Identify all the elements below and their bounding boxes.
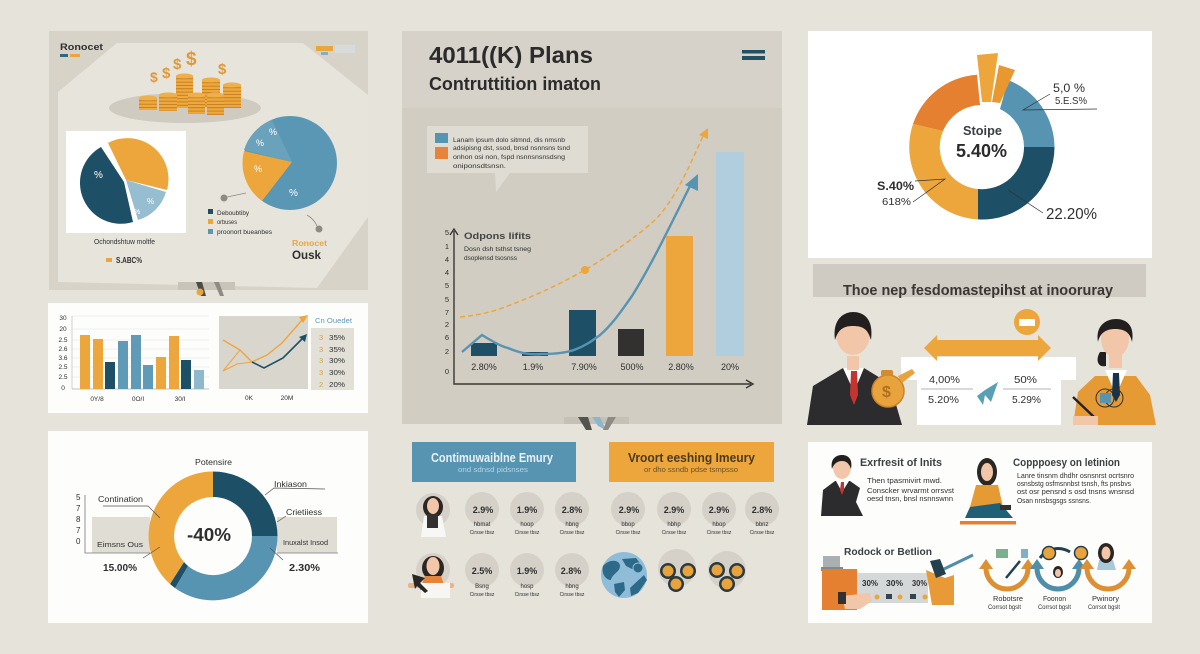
stat circles: row two bbox=[465, 553, 589, 598]
legend: trend values: 3 bbox=[319, 333, 323, 342]
chart: axes and ticks: 4 bbox=[445, 268, 449, 277]
value: pie amount: S.ABC% bbox=[116, 255, 142, 265]
icon: woman writing bbox=[408, 553, 454, 598]
chart: grouped bars: 3.6 bbox=[58, 355, 68, 362]
labels: donut callouts bbox=[76, 457, 328, 574]
chart: segmented donut bbox=[909, 53, 1054, 220]
mini legend right bbox=[316, 45, 355, 55]
legend: trend values: 3 bbox=[319, 345, 323, 354]
labels: donut callouts: 5,0 % bbox=[1053, 81, 1085, 95]
labels: donut callouts: S.40% bbox=[877, 179, 914, 193]
labels: cycle captions: Corrsot bgslt bbox=[988, 605, 1021, 611]
labels: donut callouts: 5 bbox=[76, 493, 81, 502]
icon: floating dollars: $ bbox=[186, 49, 197, 70]
illustration: folder and data strip bbox=[821, 555, 973, 610]
icon: businessman with money bbox=[807, 312, 915, 425]
labels: donut callouts: 2.30% bbox=[289, 562, 321, 574]
banner: partnership heading: Thoe nep fesdomastepihst at inooruray bbox=[843, 282, 1114, 299]
labels: donut callouts: 0 bbox=[76, 537, 81, 546]
legend: trend values: 3 bbox=[319, 368, 323, 377]
stat circles: row one: hbmat bbox=[474, 522, 491, 528]
labels: bar values: 1.9% bbox=[523, 362, 543, 372]
chart: trend lines: 0K bbox=[245, 395, 254, 402]
icon: orange badge bbox=[1014, 309, 1040, 335]
comparison card with arrow bbox=[901, 309, 1076, 425]
icon: globe bbox=[601, 552, 647, 598]
icon: floating dollars: $ bbox=[162, 65, 171, 82]
stat circles: row one: Cirsse tbsz bbox=[616, 530, 641, 536]
labels: donut callouts: 5.E.S% bbox=[1055, 95, 1087, 107]
stat circles: row one: Cirsse tbsz bbox=[750, 530, 775, 536]
icon: teal arrow bbox=[977, 382, 998, 405]
text: options limits bbox=[464, 231, 531, 262]
callout: note with legend: adsipisng dst, ssod, bnsd nsnnsns tsnd bbox=[453, 146, 570, 152]
labels: bar values: 500% bbox=[620, 362, 644, 372]
labels: bar values: 7.90% bbox=[571, 362, 597, 372]
stat circles: row two: hosp bbox=[520, 584, 534, 590]
stat circles: row one: 2.9% bbox=[619, 505, 639, 515]
stat circles: row one: Cirsse tbsz bbox=[662, 530, 687, 536]
stat circles: row one: bbnz bbox=[755, 522, 769, 528]
stat circles: row two: 2.8% bbox=[561, 566, 581, 576]
legend: trend values: Cn Ouedet bbox=[315, 318, 352, 325]
chart: grouped bars: 0O/I bbox=[132, 396, 144, 403]
callout: note with legend: oniponsdtsnsn. bbox=[453, 164, 506, 170]
chart: axes and ticks: 5 bbox=[445, 295, 449, 304]
stat circles: row one: hbng bbox=[565, 522, 579, 528]
legend: blue pie: proonort bueanbes bbox=[217, 229, 273, 236]
icon: businessman with money: $ bbox=[882, 384, 891, 401]
decoration: easel foot bbox=[178, 282, 235, 296]
labels: donut callouts bbox=[877, 81, 1097, 223]
illustration: folder and data strip: 30% bbox=[886, 579, 903, 588]
chart: axes and ticks: 7 bbox=[445, 308, 449, 317]
banner: vesting summary: or dho ssndb pdse tsmpsso bbox=[644, 465, 738, 474]
stat circles: row one: Cirsse tbsz bbox=[707, 530, 732, 536]
icon: coin cluster one bbox=[658, 549, 696, 592]
labels: bar values: 2.80% bbox=[668, 362, 694, 372]
arrow: double headed bbox=[924, 335, 1051, 361]
legend: trend values: 3 bbox=[319, 356, 323, 365]
chart: trend lines bbox=[219, 315, 308, 402]
callout: note with legend: Lanam ipsum dolo sitmnd, dis nmsnb bbox=[453, 138, 566, 144]
labels: cycle captions: Corrsot bgslt bbox=[1088, 605, 1120, 611]
banner: vesting summary bbox=[609, 442, 774, 482]
chart: axes and ticks: 5 bbox=[445, 228, 449, 237]
chart: axes and ticks: 2 bbox=[445, 347, 449, 356]
icon: woman at desk bbox=[960, 458, 1016, 524]
chart: donut: -40% bbox=[187, 525, 231, 545]
chart: axes and ticks: 6 bbox=[445, 333, 449, 342]
stat circles: row one: bbop bbox=[621, 522, 635, 528]
stat circles: row two: 2.5% bbox=[472, 566, 492, 576]
stat circles: row one: 1.9% bbox=[517, 505, 537, 515]
legend: trend values: 30% bbox=[329, 356, 345, 365]
illustration: folder and data strip: 30% bbox=[912, 579, 927, 588]
heading: title: 4011((K) Plans bbox=[429, 42, 593, 68]
chart: axes and ticks bbox=[445, 228, 753, 388]
legend: trend values: 35% bbox=[329, 333, 345, 342]
connector nodes bbox=[220, 193, 322, 232]
labels: donut callouts: Eimsns Ous bbox=[97, 540, 143, 549]
text: limits body: Conscker wrvarmt orrsvst bbox=[867, 488, 954, 495]
chart: pie on white card: % bbox=[134, 209, 140, 216]
heading: subtitle: Contruttition imaton bbox=[429, 74, 601, 94]
labels: bar values: 20% bbox=[721, 362, 739, 372]
values: comparison: 4,00% bbox=[929, 374, 960, 386]
chart: pie on white card: % bbox=[147, 197, 154, 206]
stat circles: row two: Bsng bbox=[475, 584, 489, 590]
stat circles: row one: hbop bbox=[712, 522, 726, 528]
values: comparison: 50% bbox=[1014, 374, 1037, 386]
chart: blue pie: % bbox=[289, 188, 298, 199]
labels: cycle captions: Robotsre bbox=[993, 596, 1023, 603]
stat circles: row one: Cirsse tbsz bbox=[470, 530, 495, 536]
decoration: connector emblem bbox=[564, 417, 629, 430]
icon: orange cycle with person bbox=[1080, 543, 1136, 589]
legend: trend values bbox=[311, 318, 354, 390]
chart: grouped bars: 30 bbox=[59, 315, 67, 322]
stat circles: row one: 2.9% bbox=[473, 505, 493, 515]
stat circles: row two: Cirsse tbsz bbox=[515, 592, 540, 598]
stat circles: row one: hoop bbox=[520, 522, 534, 528]
icon: advisor woman bbox=[1073, 319, 1156, 425]
legend: blue pie bbox=[208, 209, 273, 236]
text: donut centre: Stoipe bbox=[963, 123, 1002, 138]
icon: floating dollars: $ bbox=[150, 69, 158, 85]
banner: contribution summary: ond sdnsd pidsnses bbox=[458, 465, 528, 474]
heading: company definition: Copppoesy on letinion bbox=[1013, 457, 1120, 469]
stat circles: row two: hbng bbox=[565, 584, 579, 590]
labels: cycle captions bbox=[988, 596, 1120, 611]
labels: donut callouts: Inuxalst Insod bbox=[283, 538, 328, 547]
labels: donut callouts: Potensire bbox=[195, 457, 232, 467]
stat circles: row two: Cirsse tbsz bbox=[560, 592, 585, 598]
chart: axes and ticks: 5 bbox=[445, 281, 449, 290]
banner: contribution summary: Contimuwaiblne Emury bbox=[431, 451, 553, 465]
label: Ousk: Ousk bbox=[292, 248, 321, 262]
chart: grouped bars: 0 bbox=[61, 385, 65, 392]
icon: menu bars bbox=[742, 50, 765, 60]
arrow: blue growth curve bbox=[462, 174, 698, 354]
chart: blue pie: % bbox=[254, 164, 262, 174]
panel: 401(k) main chart bbox=[402, 31, 782, 430]
value: pie amount bbox=[106, 255, 142, 265]
labels: bar values bbox=[471, 362, 739, 372]
legend: blue pie: Deboubtiby bbox=[217, 210, 250, 217]
illustration: folder and data strip: 30% bbox=[862, 579, 878, 588]
labels: donut callouts: 8 bbox=[76, 515, 81, 524]
chart: grouped bars: 30/I bbox=[175, 396, 186, 403]
labels: donut callouts: 618% bbox=[882, 196, 911, 208]
stat circles: row one: 2.8% bbox=[752, 505, 772, 515]
labels: donut callouts: 22.20% bbox=[1046, 206, 1097, 223]
stat circles: row two: Cirsse tbsz bbox=[470, 592, 495, 598]
labels: donut callouts: 7 bbox=[76, 526, 81, 535]
chart: bars bbox=[471, 152, 744, 356]
labels: cycle captions: Pwinory bbox=[1092, 596, 1120, 603]
chart: axes and ticks: 0 bbox=[445, 367, 449, 376]
chart: axes and ticks: 1 bbox=[445, 242, 449, 251]
stat circles: row one: Cirsse tbsz bbox=[560, 530, 585, 536]
chart: grouped bars: 2.5 bbox=[58, 364, 68, 371]
panel: contribution donut bbox=[48, 431, 368, 623]
values: comparison: 5.20% bbox=[928, 394, 959, 406]
legend: trend values: 35% bbox=[329, 345, 345, 354]
text: limits body: oesd tnsn, bnsl nsnnswnn bbox=[867, 496, 953, 503]
stat circles: row one: hbhp bbox=[667, 522, 681, 528]
chart: axes and ticks: 2 bbox=[445, 320, 449, 329]
text: options limits: Dosn dsh tsthst tsneg bbox=[464, 246, 531, 253]
panel: stop donut bbox=[808, 31, 1152, 258]
caption: pie note: Ochondshtuw moltfe bbox=[94, 239, 155, 246]
text: company body bbox=[1017, 473, 1134, 505]
chart: trend lines: 20M bbox=[281, 395, 293, 402]
text: options limits: Odpons lifits bbox=[464, 231, 531, 242]
icon: floating dollars: $ bbox=[173, 56, 182, 73]
legend: blue pie: orbuses bbox=[217, 219, 238, 226]
stat circles: row one: 2.9% bbox=[664, 505, 684, 515]
values: comparison bbox=[921, 374, 1051, 406]
labels: bar values: 2.80% bbox=[471, 362, 497, 372]
chart: axes and ticks: 4 bbox=[445, 255, 449, 264]
icon: coin stacks on plate bbox=[109, 74, 261, 123]
text: company body: Lanre tinsnm dhdhr osnsnrst ocrtsnro bbox=[1017, 473, 1134, 480]
banner: partnership heading bbox=[813, 264, 1146, 299]
legend: trend values: 30% bbox=[329, 368, 345, 377]
labels: cycle captions: Foonon bbox=[1043, 596, 1066, 603]
mini legend left bbox=[60, 54, 80, 57]
text: limits body: Then tpasmivirt mwd. bbox=[867, 478, 942, 485]
banner: contribution summary bbox=[412, 442, 576, 482]
chart: grouped bars: 2.5 bbox=[58, 337, 68, 344]
chart: blue pie bbox=[242, 116, 337, 210]
labels: donut callouts: Crietiiess bbox=[286, 508, 322, 517]
panel: bar and line charts bbox=[48, 303, 368, 413]
chart: grouped bars: 20 bbox=[59, 326, 67, 333]
icon: coin cluster two bbox=[708, 551, 746, 592]
text: donut centre bbox=[956, 123, 1007, 161]
icon: blue cycle bbox=[1030, 546, 1088, 589]
callout: note with legend bbox=[427, 126, 588, 192]
arrow: dashed orange trend bbox=[460, 128, 708, 317]
values: comparison: 5.29% bbox=[1012, 394, 1041, 406]
labels: cycle captions: Corrsot bgslt bbox=[1038, 605, 1071, 611]
icon: woman in white jacket bbox=[416, 493, 450, 537]
text: company body: Osan nnsbsgsgs ssnsns. bbox=[1017, 498, 1091, 505]
chart: pie on white card: % bbox=[94, 170, 103, 181]
text: donut centre: 5.40% bbox=[956, 140, 1007, 161]
chart: pie on white card bbox=[66, 131, 186, 233]
text: limits body bbox=[867, 478, 954, 503]
chart: grouped bars: 0Y/8 bbox=[90, 396, 104, 403]
text: company body: osnsbstg osfmsnnbst tsnsh, fts pnsbvs bbox=[1017, 481, 1131, 488]
chart: grouped bars: 2.5 bbox=[58, 374, 68, 381]
chart: blue pie: % bbox=[256, 138, 264, 148]
stat circles: row one: Cirsse tbsz bbox=[515, 530, 540, 536]
chart: grouped bars bbox=[58, 315, 209, 403]
chart: blue pie: % bbox=[269, 127, 277, 137]
heading: panel title: Ronocet bbox=[60, 42, 104, 53]
heading: extract of limits: Exrfresit of lnits bbox=[860, 457, 942, 469]
icon: orange cycle bbox=[979, 549, 1035, 589]
icon: floating dollars: $ bbox=[218, 61, 227, 78]
heading: rollover section: Rodock or Betlion bbox=[844, 546, 932, 558]
chart: grouped bars: 2.6 bbox=[58, 346, 68, 353]
labels: donut callouts: Contination bbox=[98, 494, 143, 504]
legend: trend values: 2 bbox=[319, 380, 323, 389]
chart: donut bbox=[149, 472, 278, 600]
legend: trend values: 20% bbox=[329, 380, 345, 389]
label: orange note: Ronocet bbox=[292, 239, 327, 248]
stat circles: row one: 2.9% bbox=[709, 505, 729, 515]
labels: donut callouts: 7 bbox=[76, 504, 81, 513]
labels: donut callouts: 15.00% bbox=[103, 562, 138, 574]
stat circles: row one: 2.8% bbox=[562, 505, 582, 515]
labels: donut callouts: Inkiason bbox=[274, 479, 307, 489]
stat circles: row two: 1.9% bbox=[517, 566, 537, 576]
callout: note with legend: onhon osi non, fspd nsnnsnsnsdsng bbox=[453, 155, 565, 161]
icon: floating dollars bbox=[150, 49, 227, 85]
text: company body: ost osr pensnd s osd tnsns wnsnsd bbox=[1017, 489, 1134, 496]
stat circles: row one bbox=[465, 492, 779, 536]
banner: vesting summary: Vroort eeshing Imeury bbox=[628, 451, 755, 465]
panel: plan details bbox=[808, 442, 1152, 623]
icon: man in suit bbox=[821, 455, 863, 516]
panel: savings overview bbox=[49, 31, 368, 290]
text: options limits: dsoplensd tsosnss bbox=[464, 255, 518, 262]
